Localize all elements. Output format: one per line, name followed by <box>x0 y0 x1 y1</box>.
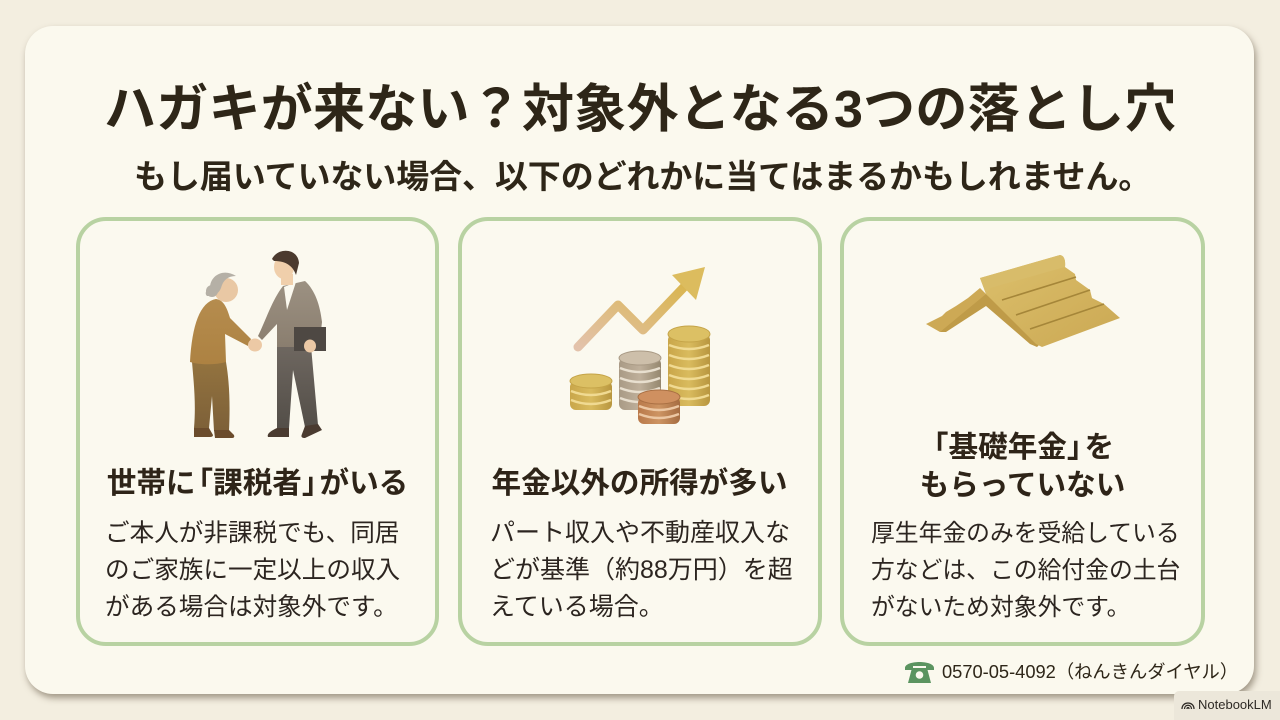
icon: coins and rising arrow <box>570 267 710 424</box>
text: other income: どが基準（約88万円）を超 <box>490 556 793 584</box>
subtitle: もし届いていない場合、以下のどれかに当てはまるかもしれません。 <box>134 158 1151 195</box>
heading: no basic pension: もらっていない <box>920 469 1125 502</box>
text: household taxpayer: がある場合は対象外です。 <box>105 594 398 621</box>
text: no basic pension: がないため対象外です。 <box>871 594 1130 621</box>
heading: no basic pension <box>919 431 1125 502</box>
heading: no basic pension: 「基礎年金」を <box>919 431 1114 464</box>
text: other income: パート収入や不動産収入な <box>490 519 790 547</box>
panel: other income <box>458 217 822 646</box>
icon: golden roof <box>926 255 1120 347</box>
text: no basic pension <box>871 520 1180 621</box>
icon: telephone <box>905 662 934 683</box>
elder figure <box>190 273 262 438</box>
text: household taxpayer: のご家族に一定以上の収入 <box>105 557 400 584</box>
contact number: 0570-05-4092（ねんきんダイヤル） <box>942 661 1238 682</box>
icon: two people shaking hands <box>190 250 326 438</box>
title: ハガキが来ない？対象外となる3つの落とし穴 <box>104 81 1177 139</box>
heading: other income: 年金以外の所得が多い <box>492 467 787 500</box>
man figure <box>258 251 326 438</box>
badge: NotebookLM: NotebookLM <box>1198 697 1272 712</box>
text: no basic pension: 厚生年金のみを受給している <box>871 520 1180 547</box>
heading: household taxpayer: 世帯に「課税者」がいる <box>107 467 408 500</box>
text: other income <box>490 519 793 621</box>
panel: household taxpayer <box>76 217 439 646</box>
text: household taxpayer: ご本人が非課税でも、同居 <box>105 520 399 547</box>
text: no basic pension: 方などは、この給付金の土台 <box>871 557 1180 584</box>
text: household taxpayer <box>105 520 400 621</box>
panel: no basic pension <box>840 217 1205 646</box>
text: other income: えている場合。 <box>490 593 664 621</box>
badge: NotebookLM <box>1174 691 1280 720</box>
